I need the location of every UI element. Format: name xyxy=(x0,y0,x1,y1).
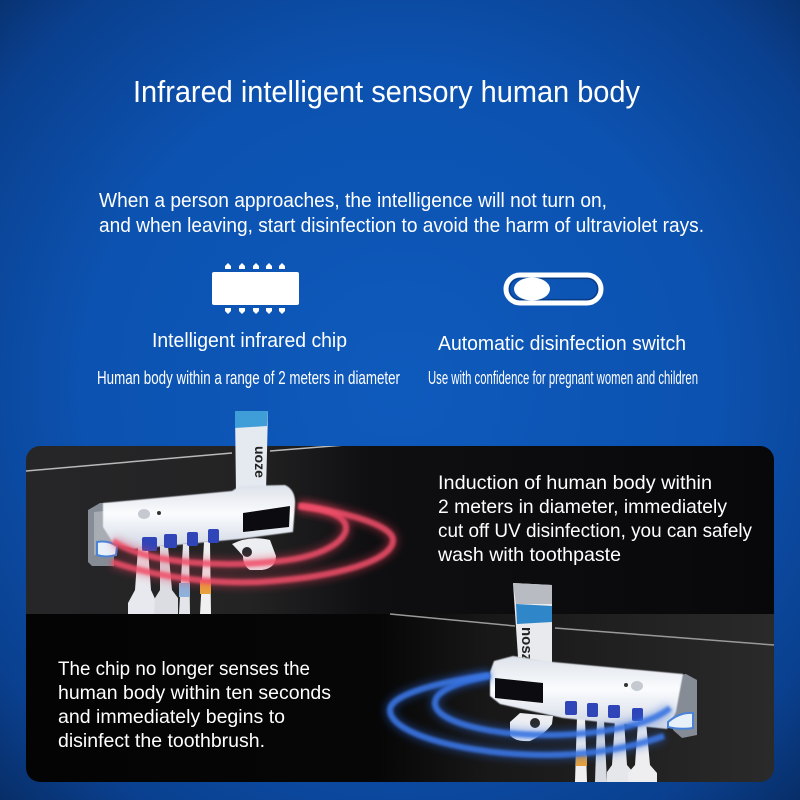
text: induction: Induction of human body within xyxy=(438,472,712,494)
intro text: and when leaving, start disinfection to avoid the harm of ultraviolet rays. xyxy=(99,215,704,237)
wall line bottom xyxy=(390,614,774,645)
holder body xyxy=(103,485,295,549)
back plate xyxy=(88,503,114,566)
feature: infrared chip: Intelligent infrared chip xyxy=(152,330,347,352)
text: induction: wash with toothpaste xyxy=(437,544,621,566)
text: induction xyxy=(437,472,752,566)
text: disinfect: human body within ten seconds xyxy=(58,682,331,704)
dispenser: bottom (blue arcs) xyxy=(390,583,697,782)
toothpaste tube: nosz xyxy=(518,627,535,661)
text: disinfect: and immediately begins to xyxy=(58,706,285,728)
text: disinfect: The chip no longer senses the xyxy=(58,658,310,680)
text: induction: 2 meters in diameter, immediately xyxy=(438,496,727,518)
toothpaste tube: uoze xyxy=(252,446,268,478)
holder body xyxy=(490,656,683,729)
panel: bottom photo background xyxy=(26,614,774,782)
toothpaste tube xyxy=(513,583,552,663)
sensor xyxy=(138,509,150,519)
intro text xyxy=(99,190,704,237)
brush cap xyxy=(668,713,693,729)
text: disinfect: disinfect the toothbrush. xyxy=(58,730,265,752)
solar panel xyxy=(243,506,290,532)
panel: top photo background xyxy=(26,446,774,614)
panel: photos xyxy=(26,445,774,782)
UV slots xyxy=(142,529,219,551)
feature: disinfection switch: Automatic disinfection switch xyxy=(438,333,686,355)
brush cap xyxy=(97,542,117,556)
feature: infrared chip xyxy=(97,330,400,388)
solar panel xyxy=(495,678,543,703)
text: disinfect xyxy=(58,658,331,752)
intro text: When a person approaches, the intelligence will not turn on, xyxy=(99,190,607,212)
icon: chip xyxy=(212,263,299,314)
toothbrushes xyxy=(575,717,657,782)
feature: disinfection switch xyxy=(428,333,698,388)
sensing arcs red xyxy=(112,506,393,582)
paste nozzle xyxy=(232,538,276,570)
dispenser: top (red arcs) xyxy=(88,411,393,614)
sensing arcs blue xyxy=(390,675,670,755)
sensor xyxy=(631,681,643,691)
wall line top xyxy=(26,445,345,471)
toothpaste tube xyxy=(235,411,268,494)
paste nozzle xyxy=(510,713,553,741)
icon: toggle switch xyxy=(506,275,601,303)
UV slots xyxy=(565,701,643,721)
back plate xyxy=(673,674,697,738)
toothbrushes xyxy=(128,542,211,614)
feature: infrared chip: Human body within a range of 2 meters in diameter xyxy=(97,368,400,388)
title: Infrared intelligent sensory human body xyxy=(133,74,640,109)
text: induction: cut off UV disinfection, you can safely xyxy=(438,520,752,542)
